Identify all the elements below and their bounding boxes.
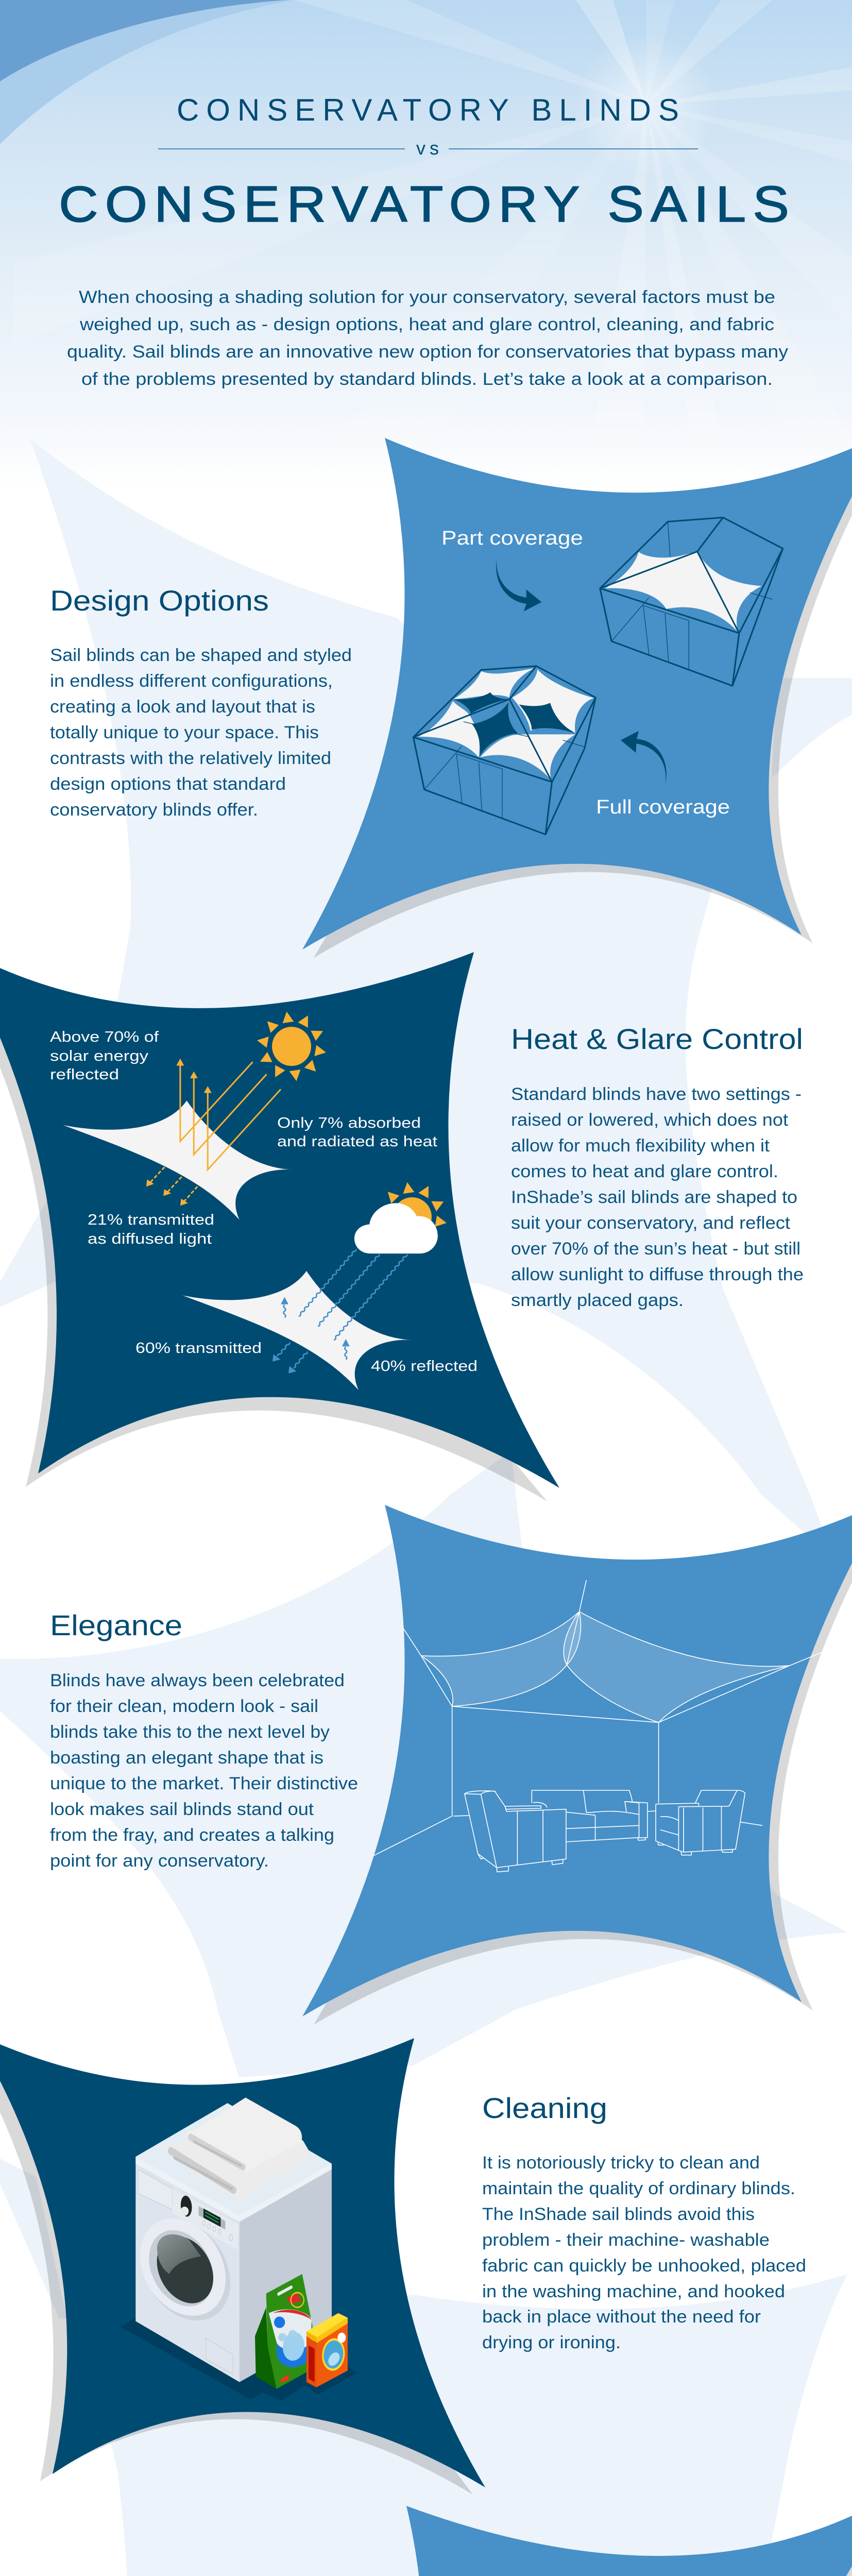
label: above 70 percent reflected: solar energy [50,1048,149,1064]
illustration: room sails outline [374,1580,822,1856]
label: only 7 percent absorbed [277,1115,437,1150]
text: elegance [50,1671,358,1871]
text: heat and glare: comes to heat and glare control. [511,1162,778,1181]
text: design options: contrasts with the relatively limited [50,749,331,768]
label: only 7 percent absorbed: and radiated as heat [277,1133,437,1150]
text: design options: totally unique to your space. This [50,723,319,742]
text: cleaning: drying or ironing. [482,2333,621,2352]
text: heat and glare: raised or lowered, which does not [511,1110,789,1130]
label: only 7 percent absorbed: Only 7% absorbed [277,1115,421,1131]
panel: fabric sail [328,2506,852,2576]
text: elegance: boasting an elegant shape that is [50,1748,323,1768]
intro paragraph: When choosing a shading solution for your conservatory, several factors must be [79,287,775,307]
text: cleaning: The InShade sail blinds avoid this [482,2205,755,2224]
text: elegance: look makes sail blinds stand out [50,1800,314,1819]
heading: heat and glare: Heat & Glare Control [511,1023,803,1055]
text: elegance: for their clean, modern look - sail [50,1697,318,1716]
label: above 70 percent reflected: reflected [50,1066,119,1083]
house diagram: full coverage [413,666,595,835]
label: 21 percent transmitted: as diffused light [88,1231,212,1247]
text: cleaning: in the washing machine, and hooked [482,2282,785,2301]
label: part coverage: Part coverage [441,528,583,549]
illustration: sofa and armchairs [453,1790,762,1872]
text: elegance: point for any conservatory. [50,1851,269,1871]
text: cleaning: It is notoriously tricky to clean and [482,2153,760,2173]
text: design options [50,646,352,820]
text: heat and glare: Standard blinds have two settings - [511,1084,802,1104]
text: elegance: blinds take this to the next level by [50,1722,330,1742]
text: elegance: Blinds have always been celebrated [50,1671,345,1690]
label: 21 percent transmitted [88,1212,214,1247]
text: design options: Sail blinds can be shaped and styled [50,646,352,665]
heading: cleaning: Cleaning [482,2092,607,2124]
heading: design options: Design Options [50,584,269,617]
text: design options: conservatory blinds offer. [50,800,258,820]
diagram: cloud on sail [182,1203,438,1390]
heading: elegance: Elegance [50,1609,182,1641]
title [59,93,796,232]
text: cleaning: back in place without the need for [482,2307,761,2327]
panel: heat and glare sail [0,952,559,1501]
panel: design options sail [302,438,852,958]
text: cleaning: problem - their machine- washable [482,2230,770,2250]
text: design options: creating a look and layout that is [50,697,315,717]
text: heat and glare: allow sunlight to diffuse through the [511,1265,804,1284]
arrow: full coverage [621,731,667,785]
illustration: washing machine [120,2097,357,2400]
panel: elegance sail [302,1505,852,2025]
text: heat and glare: over 70% of the sun’s heat - but still [511,1239,800,1259]
intro paragraph: of the problems presented by standard blinds. Let’s take a look at a comparison. [81,369,773,389]
panel: cleaning sail [0,2038,485,2495]
label: full coverage: Full coverage [596,796,730,818]
icon: sun behind cloud [384,1181,448,1236]
intro paragraph: quality. Sail blinds are an innovative new option for conservatories that bypass many [67,342,788,362]
label: above 70 percent reflected: Above 70% of [50,1029,159,1045]
icon: sun [256,1011,327,1082]
title: CONSERVATORY SAILS [59,176,796,232]
text: elegance: unique to the market. Their distinctive [50,1774,358,1793]
text: heat and glare: InShade’s sail blinds are shaped to [511,1188,797,1207]
title: vs [416,138,439,159]
background sky and rays [0,0,852,489]
label: 21 percent transmitted: 21% transmitted [88,1212,214,1228]
intro paragraph [67,287,788,389]
title: CONSERVATORY BLINDS [177,93,679,127]
label: 60 percent transmitted: 60% transmitted [135,1340,262,1357]
text: design options: in endless different configurations, [50,671,333,691]
text: cleaning [482,2153,806,2352]
label: above 70 percent reflected [50,1029,159,1083]
text: design options: design options that standard [50,774,286,794]
text: heat and glare: suit your conservatory, and reflect [511,1213,791,1233]
text: heat and glare [511,1084,804,1310]
house diagram: part coverage [600,517,783,686]
text: cleaning: fabric can quickly be unhooked, placed [482,2256,806,2276]
text: elegance: from the fray, and creates a talking [50,1825,334,1845]
arrow: part coverage [496,558,541,612]
text: cleaning: maintain the quality of ordinary blinds. [482,2179,795,2198]
label: 40 percent reflected: 40% reflected [371,1358,478,1375]
text: heat and glare: allow for much flexibility when it [511,1136,770,1156]
text: heat and glare: smartly placed gaps. [511,1291,684,1310]
diagram: sun on sail [63,1059,293,1219]
intro paragraph: weighed up, such as - design options, heat and glare control, cleaning, and fabric [79,315,774,334]
